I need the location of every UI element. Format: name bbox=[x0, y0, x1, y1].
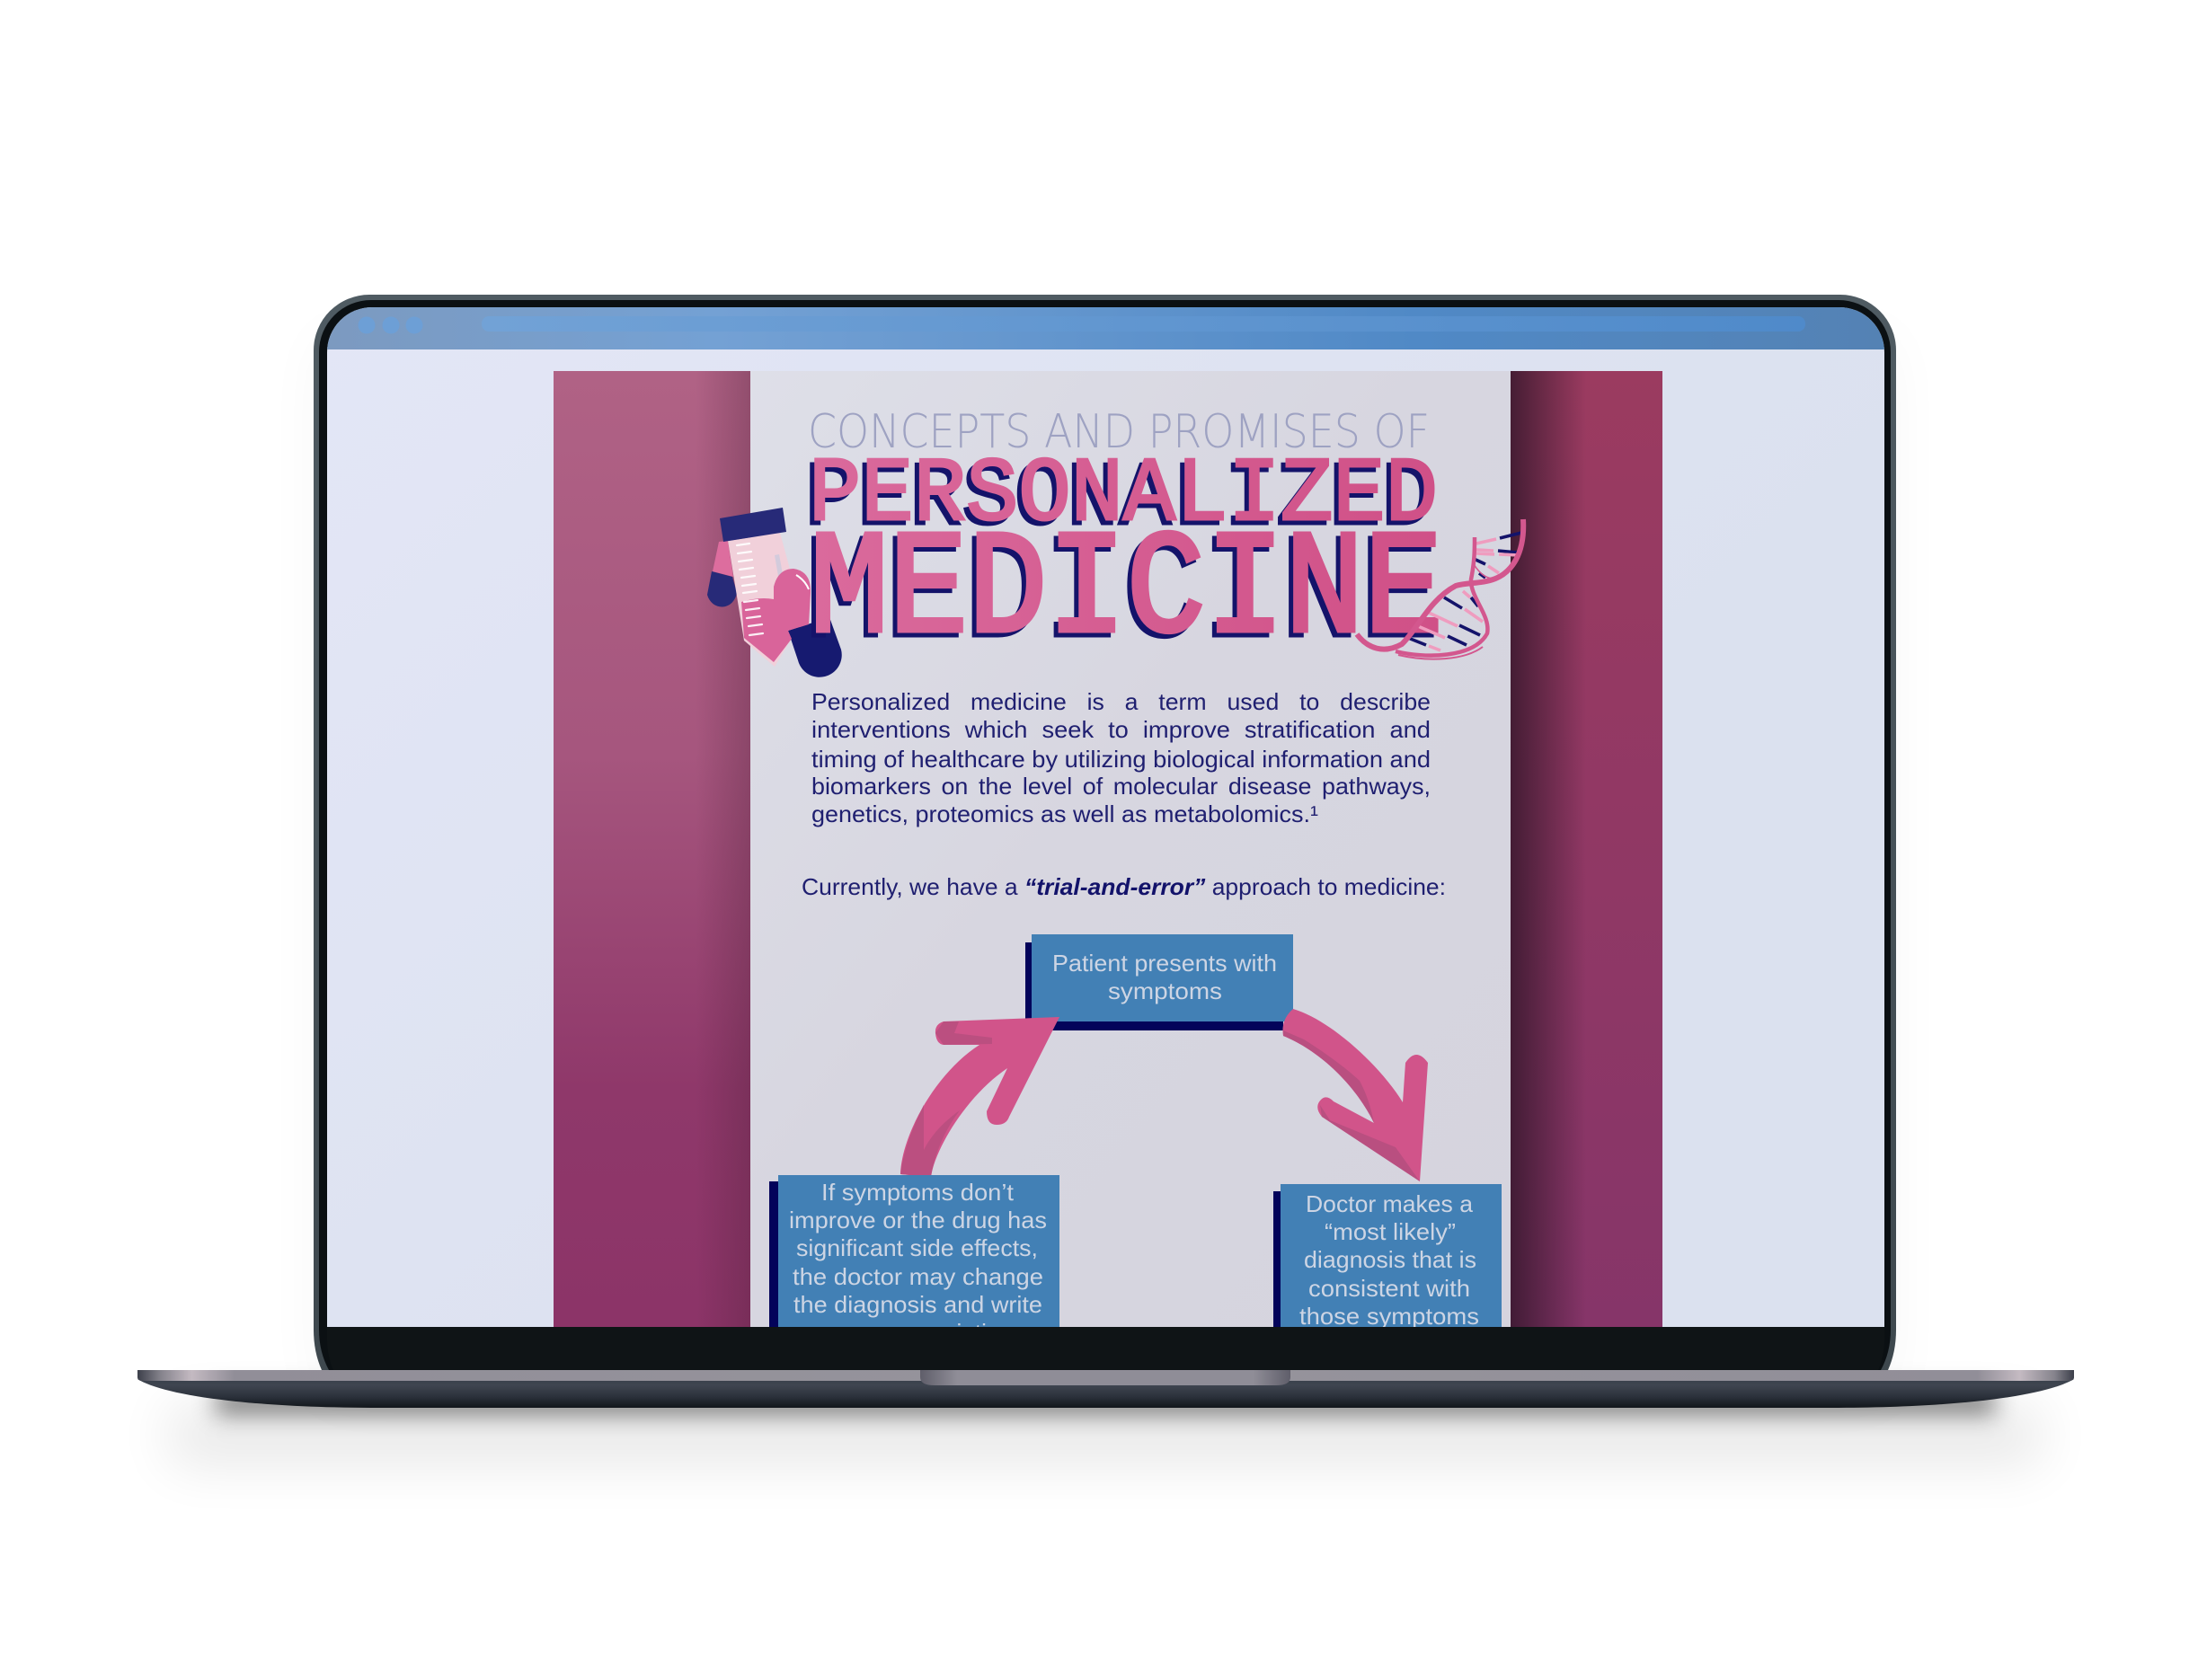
arrow: down to doctor bbox=[1282, 1009, 1428, 1181]
box: if symptoms don't improve bbox=[769, 1175, 1059, 1327]
title: medicine: MEDICINE bbox=[805, 513, 1439, 680]
box: if symptoms don't improve: significant side effects, bbox=[796, 1234, 1038, 1261]
hinge notch bbox=[920, 1370, 1290, 1385]
box: doctor makes diagnosis: “most likely” bbox=[1325, 1218, 1456, 1245]
intro text block bbox=[811, 688, 1431, 827]
panel: left side band bbox=[554, 371, 751, 1327]
box: if symptoms don't improve: improve or the drug has bbox=[789, 1207, 1047, 1233]
screen bbox=[327, 307, 1884, 1346]
icon: dna helix bbox=[1357, 519, 1523, 659]
panel: center page bbox=[750, 371, 1511, 1327]
intro text block: genetics, proteomics as well as metabolomics.¹ bbox=[811, 800, 1318, 827]
title: medicine: MEDICINE bbox=[810, 508, 1443, 676]
box: if symptoms don't improve: the diagnosis and write bbox=[793, 1291, 1042, 1318]
intro text block: biomarkers on the level of molecular disease pathways, bbox=[811, 773, 1431, 800]
title: personalized: PERSONALIZED bbox=[809, 445, 1438, 547]
box: doctor makes diagnosis bbox=[1273, 1184, 1502, 1335]
box: doctor makes diagnosis: those symptoms bbox=[1299, 1303, 1479, 1330]
box: if symptoms don't improve: the doctor may change bbox=[793, 1263, 1043, 1290]
intro text block: Personalized medicine is a term used to describe bbox=[811, 688, 1431, 715]
title: concepts and promises of: CONCEPTS AND PROMISES OF bbox=[808, 405, 1430, 459]
box: if symptoms don't improve: a new prescription bbox=[822, 1319, 1013, 1346]
soft shadow under laptop bbox=[171, 341, 2040, 1464]
panel: right side band bbox=[1510, 371, 1662, 1327]
box: patient presents: symptoms bbox=[1108, 977, 1222, 1004]
laptop base bbox=[137, 1370, 2074, 1408]
intro text block: timing of healthcare by utilizing biological information and bbox=[811, 746, 1431, 773]
arrow: up to patient bbox=[900, 1017, 1059, 1177]
box: patient presents bbox=[1025, 934, 1293, 1030]
box: doctor makes diagnosis: Doctor makes a bbox=[1306, 1190, 1474, 1217]
box: doctor makes diagnosis: consistent with bbox=[1308, 1275, 1470, 1302]
box: doctor makes diagnosis: diagnosis that is bbox=[1304, 1246, 1476, 1273]
laptop lid frame bbox=[314, 295, 1896, 1370]
title: personalized bbox=[810, 456, 1434, 526]
box: if symptoms don't improve: If symptoms don’t bbox=[821, 1179, 1015, 1206]
intro text block: interventions which seek to improve stratification and bbox=[811, 716, 1431, 743]
icon: test tube and heart bbox=[707, 508, 842, 677]
title: medicine bbox=[811, 530, 1439, 640]
title: personalized: PERSONALIZED bbox=[804, 449, 1433, 552]
browser bar bbox=[327, 307, 1884, 349]
trial-and-error line: Currently, we have a “trial-and-error” approach to medicine: bbox=[802, 873, 1446, 900]
box: patient presents: Patient presents with bbox=[1052, 950, 1277, 977]
